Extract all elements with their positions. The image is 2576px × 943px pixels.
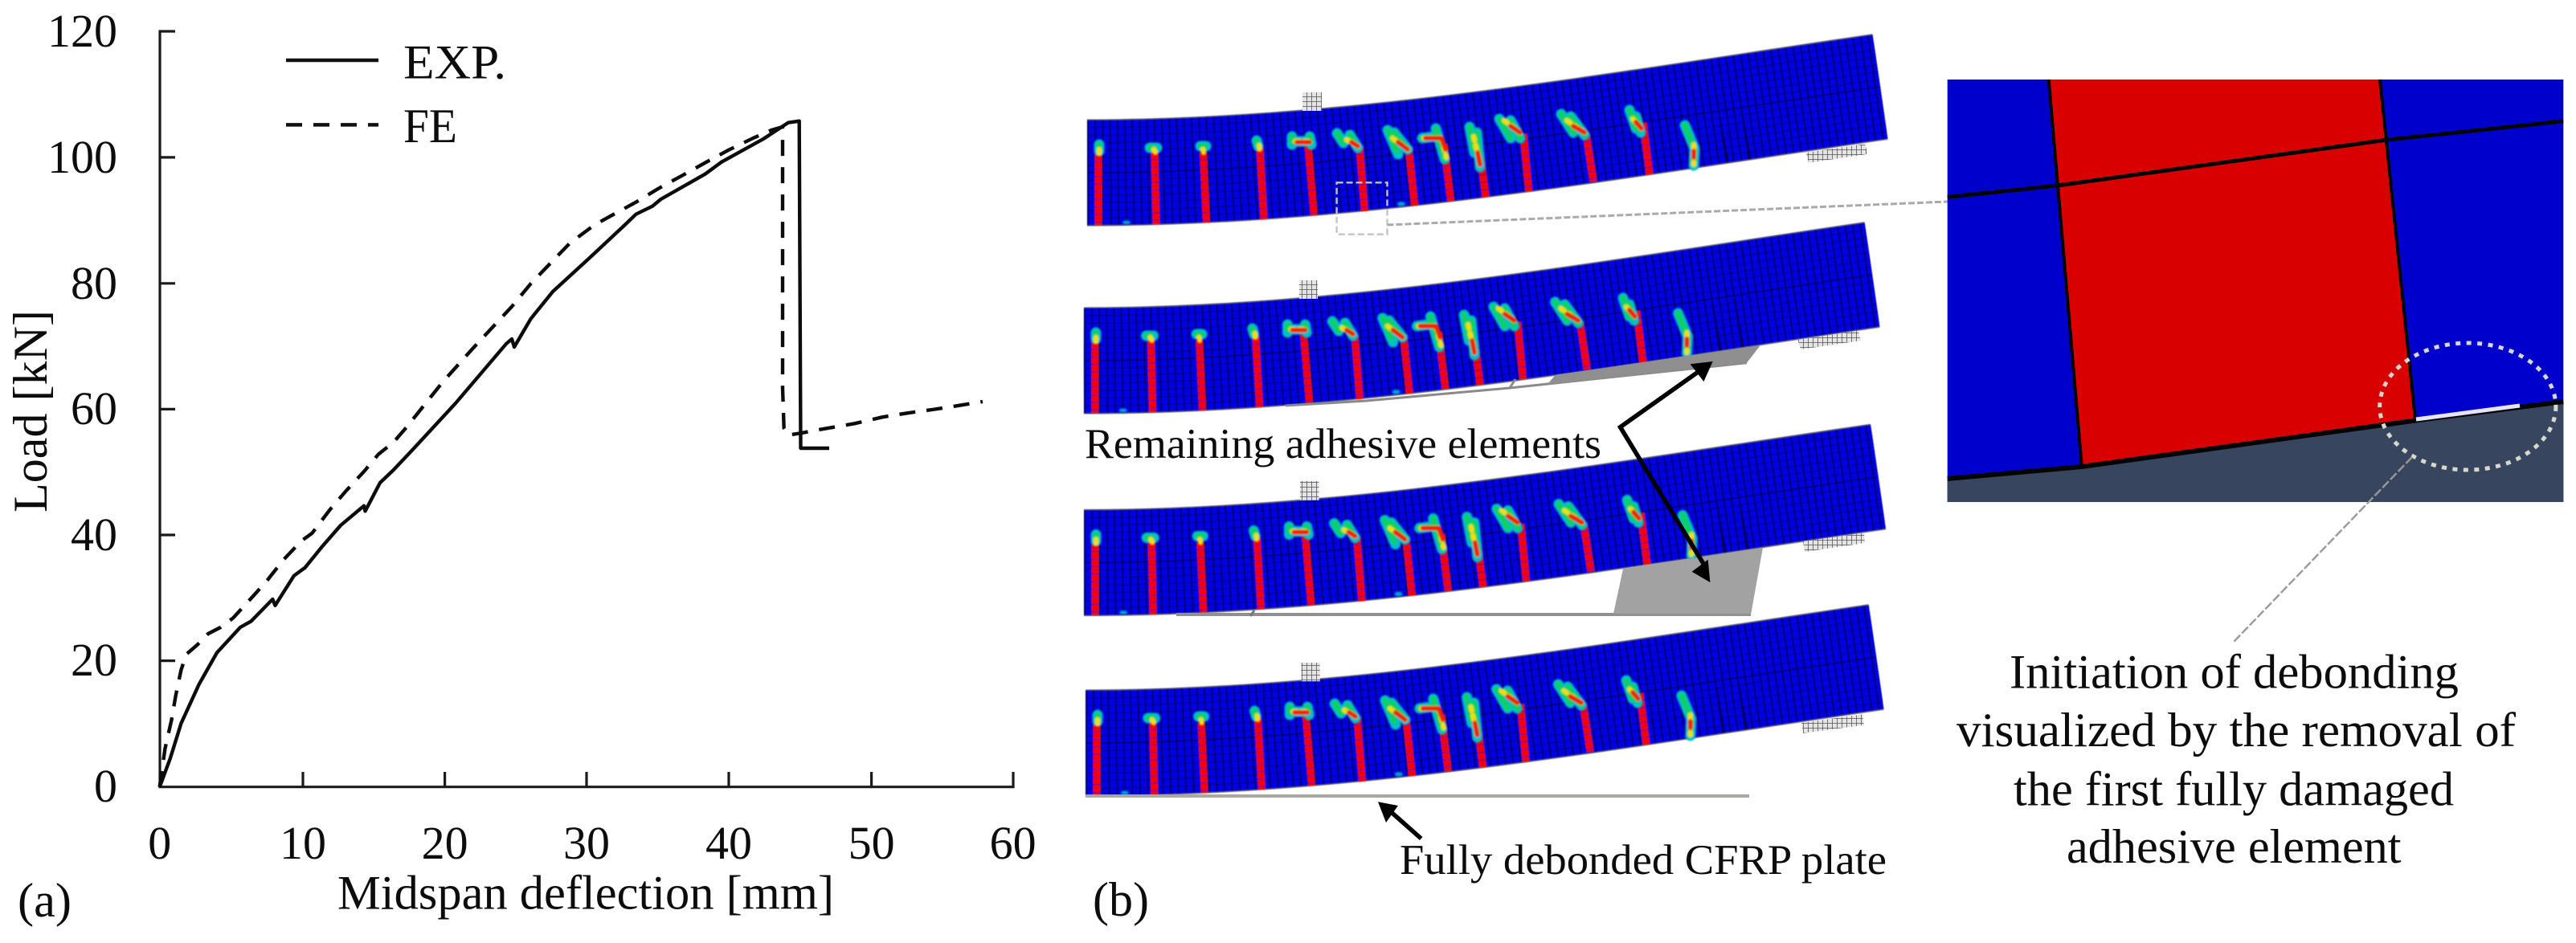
beam 3: further debonding <box>1084 477 1879 616</box>
y-axis tick labels: 60 <box>71 382 117 435</box>
beam 2: partial debonding <box>1084 275 1872 413</box>
chart axes <box>160 31 1013 787</box>
arrows: remaining adhesive <box>1620 361 1713 582</box>
x-axis tick labels: 30 <box>563 817 610 869</box>
x-axis tick labels: 10 <box>280 817 326 869</box>
panel: FE beam sequence (b) <box>1084 87 1948 926</box>
beam 1: intact state <box>1087 87 1880 225</box>
remaining adhesive elements, beam 3 <box>1613 548 1763 614</box>
callout text: visualized by the removal of <box>1957 704 2516 757</box>
CFRP plate region <box>1948 402 2563 502</box>
y-axis tick labels <box>47 5 117 812</box>
leader from zoom box to detail view <box>1387 202 1948 225</box>
y-axis tick labels: 120 <box>47 5 117 57</box>
mesh lines <box>1948 80 2563 479</box>
removed adhesive element <box>2416 406 2520 419</box>
legend <box>286 35 506 153</box>
y-axis tick labels: 80 <box>71 257 117 309</box>
red cracked element <box>2049 80 2415 467</box>
panel label (b): (b) <box>1093 873 1149 926</box>
x-axis tick labels: 60 <box>990 817 1037 869</box>
label: remaining adhesive elements: Remaining adhesive elements <box>1085 421 1601 467</box>
x-axis tick labels: 50 <box>848 817 895 869</box>
x-axis tick labels <box>148 817 1037 869</box>
y-axis tick labels: 40 <box>71 508 117 561</box>
callout text: the first fully damaged <box>2014 763 2454 816</box>
beam 4: fully debonded <box>1086 657 1876 796</box>
callout text: adhesive element <box>2067 820 2402 873</box>
dotted circle <box>2380 343 2556 470</box>
panel label (a): (a) <box>18 874 72 927</box>
curve: finite element (dashed) <box>160 127 983 787</box>
y-axis title: Load [kN] <box>4 310 57 512</box>
panel: load-deflection chart (a) <box>4 5 1037 927</box>
callout text <box>1957 646 2516 873</box>
y-axis tick labels: 20 <box>71 634 117 686</box>
legend: FE <box>403 100 457 153</box>
blue elements background <box>1948 80 2563 502</box>
x-axis tick labels: 40 <box>705 817 752 869</box>
y-axis tick labels: 0 <box>94 760 117 812</box>
y-axis tick labels: 100 <box>47 131 117 183</box>
panel: detail view of debonding initiation <box>1948 80 2563 502</box>
zoom box on beam 1 <box>1337 182 1387 235</box>
x-axis title: Midspan deflection [mm] <box>337 867 834 920</box>
x-axis tick labels: 0 <box>148 817 171 869</box>
label: fully debonded CFRP plate: Fully debonded CFRP plate <box>1400 837 1887 884</box>
legend: EXP. <box>403 35 506 88</box>
curve: experimental (solid) <box>160 121 829 787</box>
leader to callout <box>2234 457 2412 642</box>
callout text: Initiation of debonding <box>2010 646 2459 699</box>
remaining adhesive elements, beam 2 <box>1548 345 1760 384</box>
arrow: fully debonded plate <box>1378 802 1421 839</box>
x-axis tick labels: 20 <box>422 817 468 869</box>
